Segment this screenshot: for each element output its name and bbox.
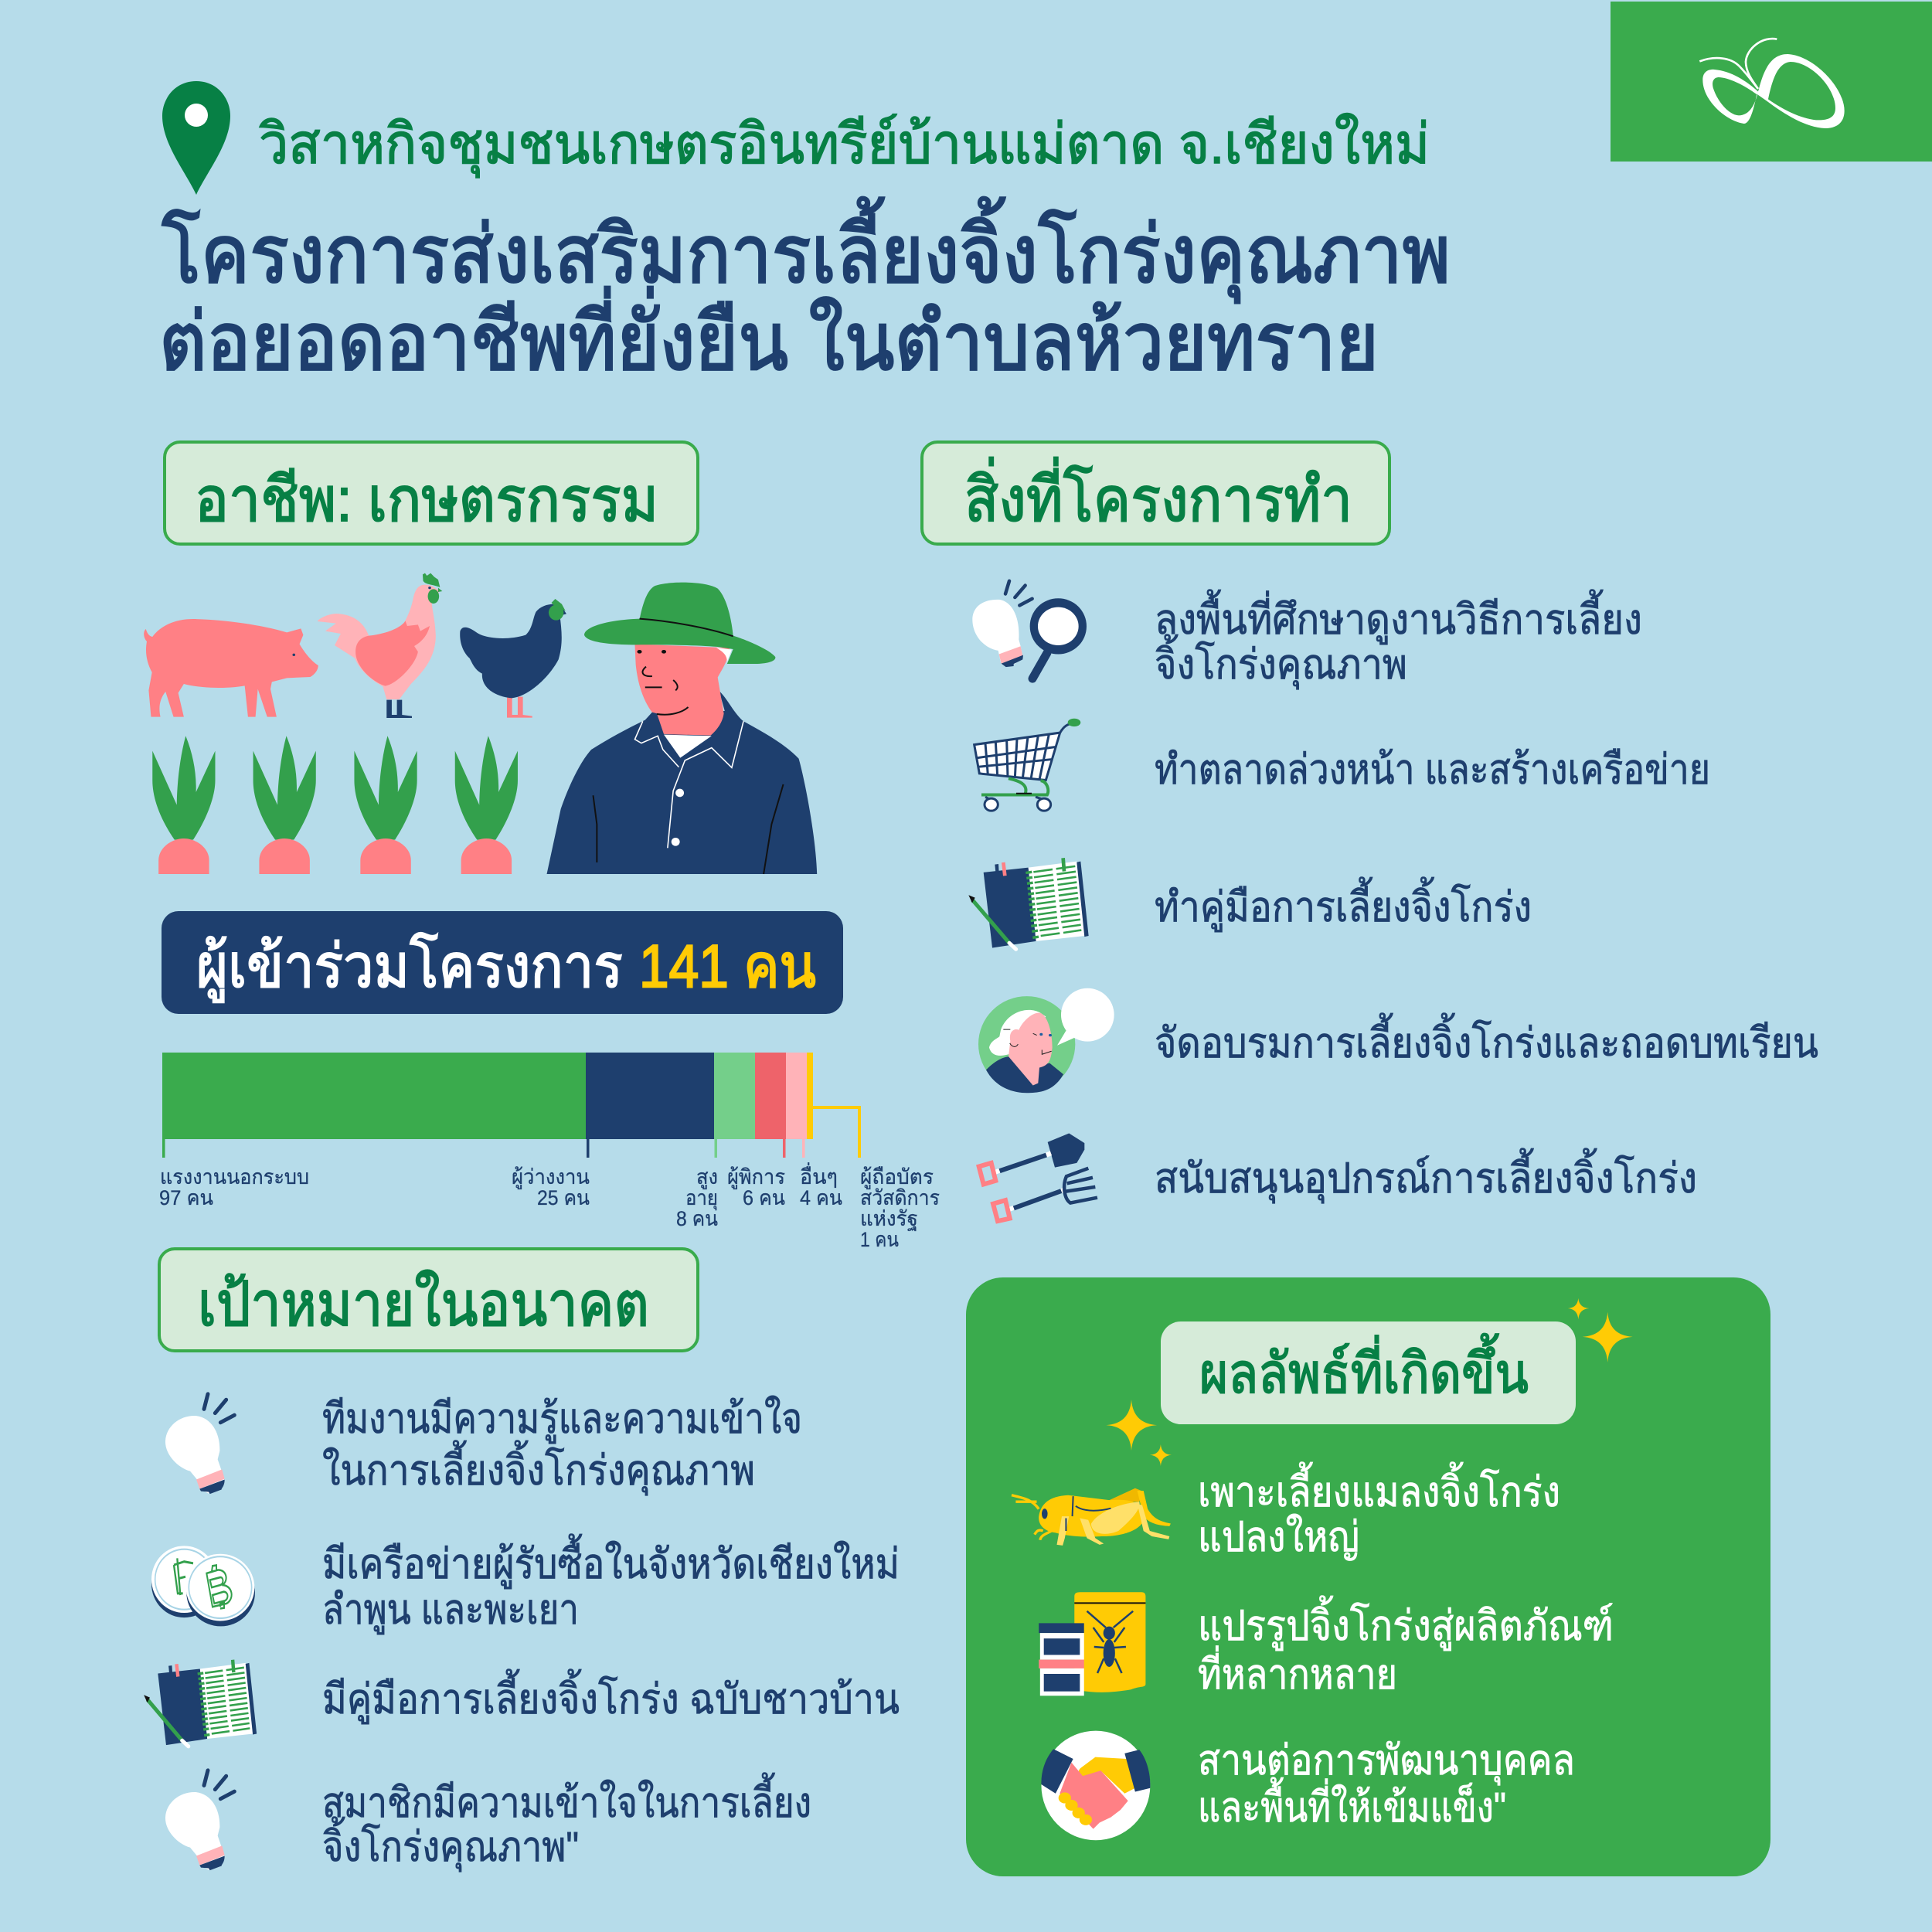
text: future goals	[322, 1395, 900, 1872]
text: future goals: มีเครือข่ายผู้รับซื้อในจังหวัดเชียงใหม่	[322, 1534, 900, 1589]
icon: pig	[144, 619, 318, 717]
icon: farmer	[547, 583, 817, 874]
label: welfare card holders: แห่งรัฐ	[860, 1207, 918, 1231]
text: future goals: ทีมงานมีความรู้และความเข้าใจ	[322, 1395, 802, 1444]
label: disabled: 6 คน	[743, 1186, 785, 1209]
label: elderly: สูง	[696, 1165, 718, 1189]
heading: what the project did	[922, 442, 1389, 544]
icon: sparkles	[1106, 1298, 1633, 1466]
text: outcomes	[1198, 1462, 1614, 1831]
text: activities: สนับสนุนอุปกรณ์การเลี้ยงจิ้งโกร่ง	[1155, 1148, 1697, 1204]
heading: outcomes	[1161, 1321, 1576, 1424]
subtitle: วิสาหกิจชุมชนเกษตรอินทรีย์บ้านแม่ตาด จ.เชียงใหม่	[259, 113, 1430, 178]
participants banner: ผู้เข้าร่วมโครงการ	[196, 932, 623, 1002]
icon: hen	[460, 599, 566, 718]
label: welfare card holders	[860, 1165, 940, 1251]
text: future goals: มีคู่มือการเลี้ยงจิ้งโกร่ง ฉบับชาวบ้าน	[322, 1669, 900, 1724]
label: others	[800, 1162, 842, 1209]
text: activities: ทำตลาดล่วงหน้า และสร้างเครือข่าย	[1155, 747, 1710, 793]
logo panel	[1611, 2, 1932, 162]
icon: notebook	[968, 858, 1089, 949]
icon: shopping cart	[975, 719, 1080, 811]
text: outcomes: และพื้นที่ให้เข้มแข็ง"	[1198, 1777, 1506, 1831]
text: future goals: สมาชิกมีความเข้าใจในการเลี้ยง	[322, 1773, 811, 1826]
icon: teacher with speech bubble	[978, 988, 1114, 1093]
title	[159, 197, 1451, 387]
label: welfare card holders: ผู้ถือบัตร	[860, 1165, 934, 1189]
heading: what the project did: สิ่งที่โครงการทำ	[964, 457, 1352, 534]
text: outcomes: แปรรูปจิ้งโกร่งสู่ผลิตภัณฑ์	[1198, 1596, 1614, 1651]
title: ต่อยอดอาชีพที่ยั่งยืน ในตำบลห้วยทราย	[159, 287, 1379, 387]
icon: farm tools	[979, 1133, 1097, 1221]
heading: occupation	[165, 442, 698, 544]
text: future goals: จิ้งโกร่งคุณภาพ"	[322, 1817, 579, 1872]
icon: cricket	[1012, 1488, 1171, 1546]
text: activities	[1155, 590, 1818, 1204]
label: disabled: ผู้พิการ	[727, 1165, 785, 1189]
label: elderly: 8 คน	[676, 1207, 718, 1230]
text: activities: จัดอบรมการเลี้ยงจิ้งโกร่งและถอดบทเรียน	[1155, 1013, 1818, 1066]
text: future goals: ในการเลี้ยงจิ้งโกร่งคุณภาพ	[322, 1440, 755, 1496]
icon: light bulb	[165, 1394, 234, 1494]
text: future goals: ลำพูน และพะเยา	[322, 1587, 579, 1634]
text: outcomes: สานต่อการพัฒนาบุคคล	[1198, 1737, 1575, 1786]
panel: future goals list	[144, 1394, 900, 1872]
farm illustration	[144, 573, 817, 874]
label: informal workers	[159, 1165, 309, 1209]
text: outcomes: แปลงใหญ่	[1198, 1513, 1359, 1560]
title: โครงการส่งเสริมการเลี้ยงจิ้งโกร่งคุณภาพ	[162, 197, 1451, 304]
participants banner: 141 คน	[639, 932, 816, 1000]
participants banner	[162, 911, 843, 1014]
label: others: 4 คน	[800, 1186, 842, 1209]
heading: occupation: อาชีพ: เกษตรกรรม	[195, 465, 658, 534]
icon: handshake	[1041, 1731, 1150, 1840]
icon: notebook	[144, 1659, 257, 1747]
label: welfare card holders: 1 คน	[860, 1228, 899, 1251]
stacked bar chart	[162, 1053, 859, 1158]
icon: location pin	[162, 81, 230, 195]
text: outcomes: เพาะเลี้ยงแมลงจิ้งโกร่ง	[1198, 1462, 1560, 1515]
text: activities: ทำคู่มือการเลี้ยงจิ้งโกร่ง	[1155, 877, 1532, 932]
text: outcomes: ที่หลากหลาย	[1198, 1645, 1397, 1698]
label: unemployed: 25 คน	[537, 1186, 590, 1209]
label: unemployed	[512, 1165, 590, 1209]
icon: rooster	[318, 573, 442, 718]
label: elderly: อายุ	[685, 1186, 718, 1211]
icon: infinity butterfly logo	[1699, 39, 1845, 128]
heading: future goals: เป้าหมายในอนาคต	[198, 1269, 649, 1338]
icon: light bulb	[165, 1770, 234, 1870]
label: unemployed: ผู้ว่างงาน	[512, 1165, 590, 1189]
label: elderly	[676, 1165, 718, 1230]
panel: project activities	[968, 581, 1818, 1221]
label: others: อื่นๆ	[800, 1162, 838, 1189]
heading: future goals	[159, 1249, 698, 1351]
label: welfare card holders: สวัสดิการ	[860, 1186, 940, 1209]
chart labels	[159, 1162, 940, 1251]
label: disabled	[727, 1165, 785, 1209]
icon: coins	[151, 1546, 255, 1626]
icon: bulb and magnifier	[972, 581, 1087, 679]
heading: outcomes: ผลลัพธ์ที่เกิดขึ้น	[1199, 1333, 1529, 1405]
icon: product jars	[1039, 1592, 1145, 1696]
icon: carrots	[152, 736, 518, 874]
label: informal workers: แรงงานนอกระบบ	[160, 1165, 309, 1189]
panel: outcomes	[966, 1277, 1770, 1876]
label: informal workers: 97 คน	[159, 1186, 213, 1209]
text: activities: จิ้งโกร่งคุณภาพ	[1155, 634, 1407, 690]
text: activities: ลงพื้นที่ศึกษาดูงานวิธีการเลี้ยง	[1155, 590, 1642, 645]
